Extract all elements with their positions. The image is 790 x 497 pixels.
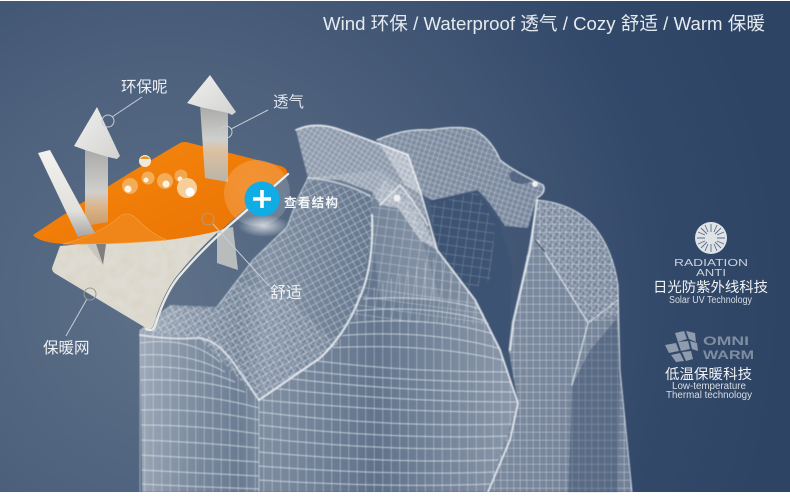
right arrow head	[187, 75, 236, 115]
material sample	[33, 75, 290, 331]
diagonal arrow	[38, 150, 106, 265]
dark sleeve interior	[568, 318, 620, 492]
callout: 舒适	[202, 213, 302, 302]
body left and centre	[140, 170, 518, 492]
badge: radiation anti: ANTI	[696, 267, 726, 279]
badge: omni warm: WARM	[703, 348, 754, 362]
right arrow shaft	[200, 105, 228, 182]
badge: radiation anti	[653, 222, 768, 306]
right panel	[488, 200, 632, 492]
callout: 查看结构: 查看结构	[284, 195, 338, 210]
left panel grid	[140, 330, 260, 495]
text: 日光防紫外线科技: 日光防紫外线科技	[653, 279, 768, 296]
right shoulder fine grid	[537, 200, 618, 323]
orange layer	[33, 142, 287, 244]
translucent magnifier halo	[224, 160, 290, 226]
water droplets	[122, 155, 197, 198]
shirt wireframe	[140, 125, 632, 495]
centre panel grid	[259, 250, 524, 495]
bright seams	[140, 125, 632, 492]
white edge of fabric	[146, 174, 288, 330]
lower arrow shaft	[217, 227, 238, 270]
inner back of shirt	[430, 192, 512, 352]
orange fold	[63, 214, 167, 244]
collar dark spot	[509, 168, 535, 184]
title: Wind 环保 / Waterproof 透气 / Cozy 舒适 / Warm 保暖	[323, 13, 765, 34]
callout: 环保呢: 环保呢	[121, 78, 168, 96]
white blob under plus button	[238, 215, 290, 237]
inner neck faint grid	[430, 192, 495, 290]
upper chest grid	[350, 180, 490, 325]
collar buttons	[394, 181, 538, 202]
callout: 舒适: 舒适	[270, 284, 302, 302]
back collar	[377, 128, 544, 228]
left shoulder grid	[140, 178, 372, 400]
text: 低温保暖科技: 低温保暖科技	[665, 366, 752, 383]
callout: 透气: 透气	[273, 93, 304, 111]
text: OMNI WARM: OMNI	[703, 334, 749, 348]
plus button	[244, 182, 280, 216]
text: RADIATION ANTI: RADIATION	[674, 257, 748, 269]
callout: 保暖网	[43, 288, 96, 357]
left arrow shaft	[85, 150, 108, 226]
callout: 保暖网: 保暖网	[43, 339, 90, 357]
icon: sun	[695, 222, 727, 254]
icon: solar tiles	[665, 331, 698, 362]
left arrow head	[74, 107, 120, 159]
text: Thermal technology: Thermal technology	[666, 390, 752, 401]
callout: 透气	[220, 93, 304, 138]
text: Low-temperature: Low-temperature	[672, 381, 746, 392]
fleece layer	[52, 230, 218, 328]
fine shoulder pocket grid	[150, 280, 337, 398]
slit on right shoulder	[535, 240, 545, 252]
callout: 环保呢	[102, 78, 168, 127]
left collar	[296, 125, 437, 250]
text: Solar UV Technology: Solar UV Technology	[669, 295, 752, 306]
badge: omni warm	[665, 331, 754, 401]
